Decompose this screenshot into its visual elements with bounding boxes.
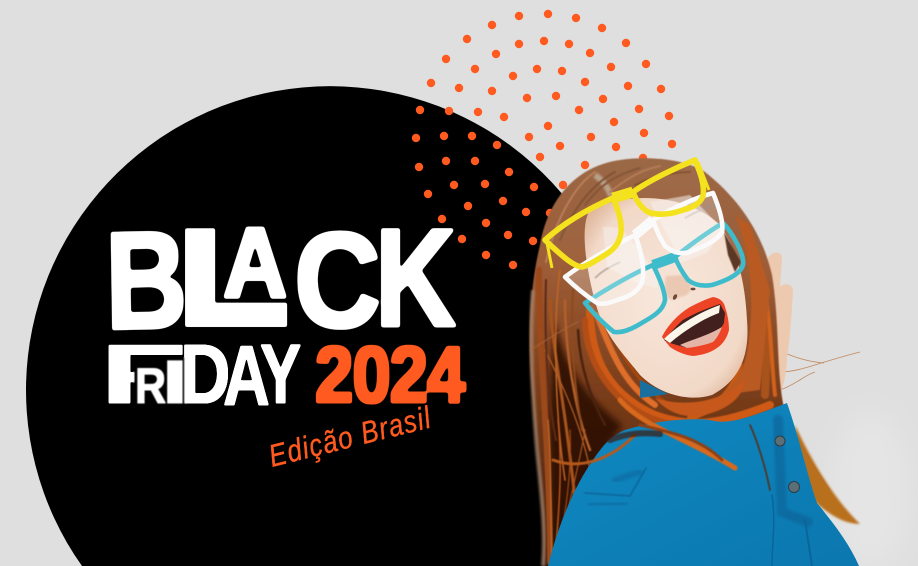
dark hair gap by right temple bbox=[724, 232, 741, 272]
title: FRIDAY: R bbox=[135, 358, 166, 414]
shirt collar at neck bbox=[640, 380, 668, 398]
mouth interior bbox=[664, 304, 725, 348]
lens glare patches bbox=[603, 195, 723, 288]
title: FRIDAY: F bbox=[100, 327, 187, 421]
title: FRIDAY: I bbox=[161, 348, 189, 416]
teeth bbox=[664, 305, 720, 343]
title: BLACK: B bbox=[104, 201, 188, 359]
lips bbox=[662, 297, 729, 356]
light halo on left hair edge bbox=[531, 290, 544, 566]
hair mass bbox=[530, 158, 784, 566]
title: FRIDAY: Y bbox=[260, 327, 301, 421]
hair streaks bbox=[530, 166, 775, 562]
title: BLACK: C bbox=[294, 205, 381, 357]
title: FRIDAY: D bbox=[180, 328, 231, 421]
tongue bbox=[680, 327, 722, 348]
subtitle: Edição Brasil: Edição Brasil bbox=[265, 400, 435, 474]
right hair tail bbox=[778, 350, 860, 524]
dotted orange halftone arc bbox=[412, 10, 676, 269]
yellow glasses bbox=[545, 160, 709, 268]
eye shadows bbox=[595, 205, 717, 278]
black circle bbox=[26, 86, 634, 566]
shirt buttons bbox=[775, 436, 800, 492]
title: BLACK: K bbox=[375, 199, 456, 356]
title: BLACK bbox=[104, 199, 456, 359]
title: BLACK: A bbox=[223, 207, 287, 319]
face bbox=[585, 198, 748, 398]
front hair strands over shirt bbox=[553, 400, 770, 490]
teal glasses bbox=[585, 223, 743, 332]
shirt details and folds bbox=[585, 420, 812, 566]
hand bbox=[755, 253, 793, 412]
shirt bbox=[548, 403, 859, 566]
hair band under chin bbox=[655, 378, 745, 416]
dark lower hair bbox=[550, 320, 622, 562]
white glasses bbox=[565, 193, 722, 304]
cheek hair overlap bbox=[722, 215, 770, 395]
nose shadow bbox=[665, 275, 691, 300]
hair parting highlight bbox=[595, 175, 611, 196]
lighter halo at bottom right bbox=[830, 410, 910, 566]
title: FRIDAY bbox=[100, 327, 301, 424]
mouth bbox=[662, 297, 729, 356]
photo: woman with stacked glasses bbox=[530, 158, 860, 566]
title: FRIDAY: A bbox=[223, 330, 270, 424]
nostrils bbox=[672, 288, 696, 300]
title: BLACK: L bbox=[173, 206, 292, 350]
title: 2024: 2024 bbox=[315, 329, 466, 419]
